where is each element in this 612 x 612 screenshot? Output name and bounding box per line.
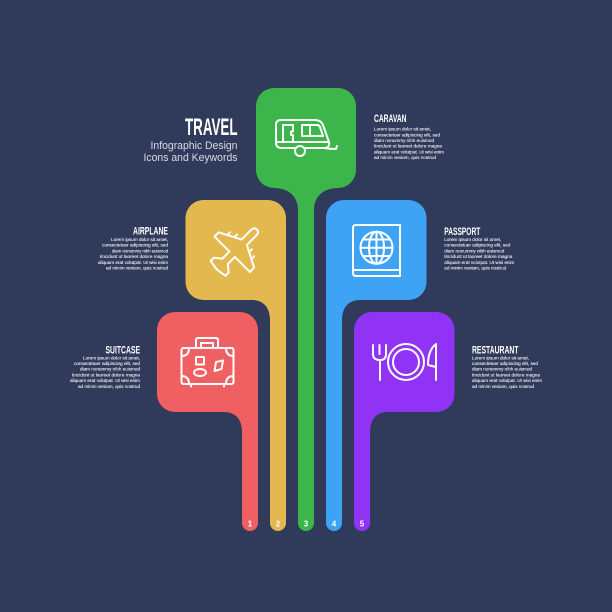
text block: passport: Lorem ipsum dolor sit amet, (444, 237, 501, 242)
text block: caravan: Lorem ipsum dolor sit amet, (374, 127, 431, 132)
panel: airplane pin (186, 200, 286, 531)
text block: caravan: tincidunt ut laoreet dolore magna (374, 144, 443, 149)
text block: suitcase: ad minim veniam, quis nostrud (78, 384, 141, 389)
text block: restaurant: Lorem ipsum dolor sit amet, (472, 355, 529, 360)
icon: passport (353, 225, 400, 276)
panel: suitcase pin (157, 312, 258, 531)
text block: caravan: diam nonummy nibh euismod (374, 138, 435, 143)
text block: passport: aliquam erat volutpat. Ut wisi enim (444, 260, 515, 265)
text block: restaurant (472, 344, 542, 389)
text block: airplane (98, 226, 169, 270)
icon: caravan (276, 120, 337, 156)
text block: restaurant: RESTAURANT (472, 344, 519, 356)
panel: passport pin (326, 200, 426, 531)
text block: passport (444, 226, 515, 270)
icon: suitcase (182, 338, 234, 386)
text block: airplane: aliquam erat volutpat. Ut wisi enim (98, 260, 168, 265)
text block: airplane: consectetuer adipiscing elit, sed (102, 243, 169, 248)
text block: caravan: ad minim veniam, quis nostrud (374, 155, 437, 160)
panel: caravan pin (256, 88, 356, 531)
icon: airplane (199, 212, 275, 287)
title block: Infographic Design (150, 140, 238, 152)
step numbers (248, 520, 365, 528)
text block: airplane: AIRPLANE (133, 226, 168, 238)
text block: passport: PASSPORT (444, 226, 480, 238)
title block: Icons and Keywords (144, 152, 238, 164)
step numbers: 5 (360, 520, 365, 528)
text block: restaurant: ad minim veniam, quis nostrud (472, 384, 535, 389)
text block: caravan: consectetuer adipiscing elit, sed (374, 132, 441, 137)
text block: suitcase: SUITCASE (106, 344, 140, 356)
text block: airplane: ad minim veniam, quis nostrud (106, 266, 169, 270)
title block (144, 114, 238, 164)
text block: passport: diam nonummy nibh euismod (444, 248, 505, 253)
text block: caravan (374, 113, 444, 160)
text block: caravan: aliquam erat volutpat. Ut wisi enim (374, 149, 444, 154)
text block: restaurant: tincidunt ut laoreet dolore magna (472, 372, 541, 377)
text block: suitcase: diam nonummy nibh euismod (80, 367, 141, 372)
text block: restaurant: diam nonummy nibh euismod (472, 367, 533, 372)
text block: passport: consectetuer adipiscing elit, sed (444, 243, 511, 248)
text block: suitcase (70, 344, 141, 389)
text block: airplane: diam nonummy nibh euismod (112, 248, 168, 253)
text block: caravan: CARAVAN (374, 113, 407, 125)
text block: airplane: Lorem ipsum dolor sit amet, (111, 237, 168, 242)
title block: TRAVEL (185, 114, 238, 141)
icon: plate and cutlery (373, 344, 436, 380)
text block: suitcase: tincidunt ut laoreet dolore magna (72, 372, 141, 377)
text block: passport: tincidunt ut laoreet dolore magna (444, 254, 513, 259)
text block: suitcase: aliquam erat volutpat. Ut wisi enim (70, 378, 140, 383)
step numbers: 1 (248, 520, 253, 528)
panel: restaurant pin (354, 312, 454, 531)
text block: suitcase: consectetuer adipiscing elit, sed (74, 361, 141, 366)
text block: restaurant: consectetuer adipiscing elit, sed (472, 361, 539, 366)
text block: airplane: tincidunt ut laoreet dolore magna (100, 254, 169, 259)
text block: passport: ad minim veniam, quis nostrud (444, 266, 507, 270)
step numbers: 2 (276, 520, 281, 528)
step numbers: 4 (332, 520, 337, 528)
step numbers: 3 (304, 520, 309, 528)
text block: suitcase: Lorem ipsum dolor sit amet, (83, 355, 140, 360)
text block: restaurant: aliquam erat volutpat. Ut wisi enim (472, 378, 542, 383)
